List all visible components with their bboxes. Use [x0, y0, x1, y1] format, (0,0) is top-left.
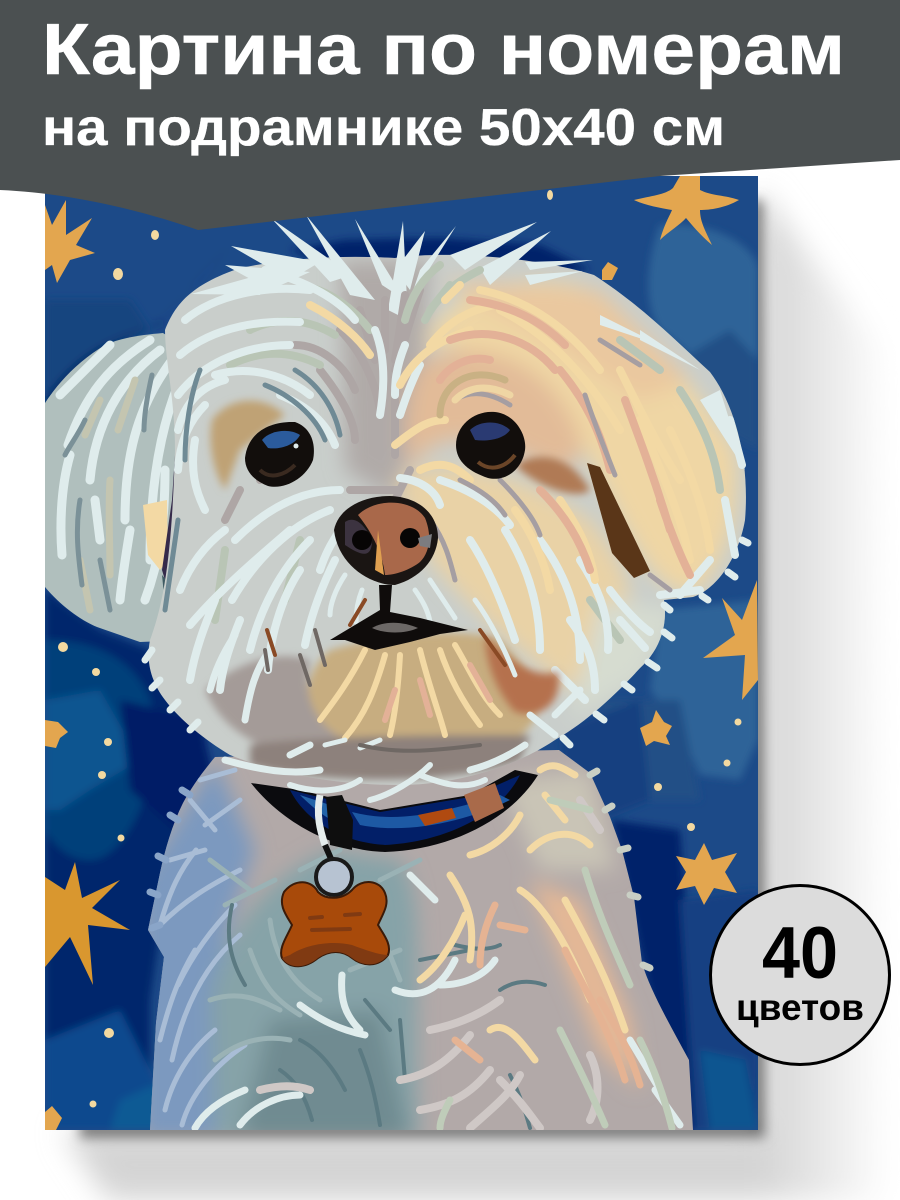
head edge fringe	[145, 540, 748, 745]
left eye	[245, 422, 314, 487]
white fur strokes	[178, 270, 742, 700]
painting background	[45, 176, 758, 1130]
grey shadow strokes right side	[430, 340, 670, 590]
tan eye arc right	[440, 375, 510, 415]
collar	[251, 770, 538, 852]
collar clasp and ring	[316, 795, 353, 895]
body fur strokes	[160, 770, 245, 1125]
stars and dots	[45, 176, 758, 1130]
dog body	[140, 740, 710, 1140]
body base colours	[140, 740, 710, 1140]
peach strokes	[440, 300, 690, 575]
sage forehead strokes	[215, 265, 720, 640]
grey forehead strokes	[225, 290, 420, 520]
mouth	[330, 585, 468, 650]
dark ear fold	[587, 463, 650, 578]
bone tag	[281, 882, 389, 966]
dog head	[140, 215, 760, 800]
title: Картина по номерам	[42, 10, 845, 90]
subtitle: на подрамнике 50х40 см	[42, 99, 725, 157]
painting: dog on starry night	[45, 176, 760, 1140]
canvas shadow	[62, 186, 885, 1200]
teal shadow above left eye	[165, 370, 340, 610]
muzzle fur strokes	[320, 645, 500, 738]
left ear	[45, 333, 175, 642]
nose	[334, 496, 438, 585]
badge number: 40	[762, 913, 838, 994]
badge: 40 colours	[710, 886, 890, 1064]
navy between fur spikes	[291, 234, 589, 273]
right eye	[456, 412, 525, 479]
head base colours	[140, 240, 760, 800]
header banner	[0, 0, 900, 230]
cream highlight strokes	[310, 285, 710, 590]
body outer fur tufts	[150, 790, 190, 928]
jowl	[485, 635, 559, 714]
fur over collar	[290, 765, 485, 800]
badge caption: цветов	[736, 987, 864, 1028]
top fur spikes	[191, 215, 745, 470]
